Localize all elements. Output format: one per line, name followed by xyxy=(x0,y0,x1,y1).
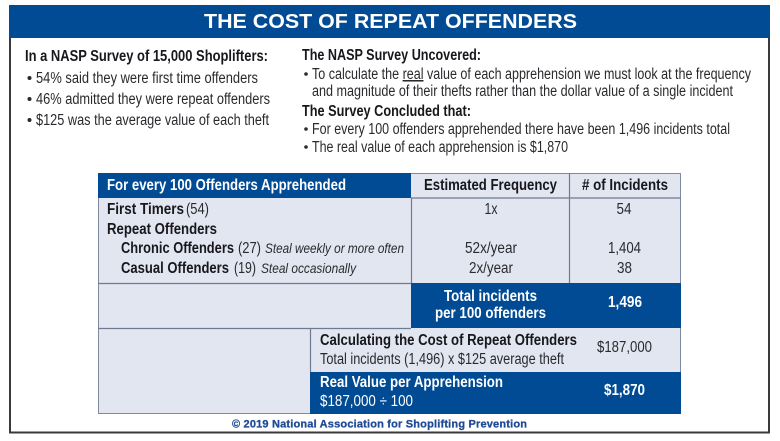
row: first timers xyxy=(107,201,632,218)
title banner xyxy=(9,5,770,38)
row: casual offenders: 38 xyxy=(617,260,632,277)
row: chronic offenders: 52x/year xyxy=(465,240,517,257)
table header row: # of Incidents xyxy=(582,177,668,194)
row: first timers: (54) xyxy=(186,201,209,218)
row: calculating the cost xyxy=(320,332,652,368)
row: total incidents: 1,496 xyxy=(608,294,642,311)
table header row xyxy=(98,173,668,198)
text block: survey concluded: The Survey Concluded that: xyxy=(302,103,471,120)
row: repeat offenders: Repeat Offenders xyxy=(107,221,217,238)
row: casual offenders: Casual Offenders xyxy=(121,260,229,277)
text block: survey facts: 54% said they were first time offenders xyxy=(36,70,258,87)
row: first timers: 1x xyxy=(484,201,498,218)
text block: survey facts: 46% admitted they were repeat offenders xyxy=(36,91,270,108)
title banner: THE COST OF REPEAT OFFENDERS xyxy=(204,10,577,33)
table background xyxy=(98,174,680,414)
row: chronic offenders: 1,404 xyxy=(608,240,641,257)
text block: survey concluded xyxy=(302,103,730,156)
footer copyright: © 2019 National Association for Shoplifting Prevention xyxy=(232,418,527,430)
row: calculating the cost: Total incidents (1,496) x $125 average theft xyxy=(320,351,565,368)
row: calculating the cost: $187,000 xyxy=(597,339,652,356)
row: total incidents: Total incidents xyxy=(444,288,537,305)
row: casual offenders xyxy=(121,260,632,277)
row: chronic offenders: (27) xyxy=(238,240,261,257)
row: real value per apprehension: $187,000 ÷ 100 xyxy=(320,393,413,410)
text block: survey uncovered: The NASP Survey Uncovered: xyxy=(302,47,481,64)
table header row: For every 100 Offenders Apprehended xyxy=(107,177,346,194)
row: first timers: 54 xyxy=(616,201,632,218)
row: total incidents xyxy=(411,283,681,328)
row: casual offenders: (19) xyxy=(234,260,256,277)
row: casual offenders: Steal occasionally xyxy=(261,260,357,276)
row: real value per apprehension: $1,870 xyxy=(604,382,645,399)
text block: survey uncovered xyxy=(302,47,751,100)
table xyxy=(98,173,681,414)
text block: survey concluded: The real value of each apprehension is $1,870 xyxy=(312,139,568,156)
row: chronic offenders: Steal weekly or more often xyxy=(265,240,404,256)
row: first timers: First Timers xyxy=(107,201,184,218)
text block: survey facts xyxy=(25,48,270,129)
row: chronic offenders: Chronic Offenders xyxy=(121,240,234,257)
row: real value per apprehension: Real Value per Apprehension xyxy=(320,374,503,391)
row: total incidents: per 100 offenders xyxy=(435,305,546,322)
table header row: Estimated Frequency xyxy=(424,177,557,194)
row: chronic offenders xyxy=(121,240,641,257)
row: calculating the cost: Calculating the Cost of Repeat Offenders xyxy=(320,332,577,349)
row: real value per apprehension xyxy=(310,372,681,414)
text block: survey facts: In a NASP Survey of 15,000 Shoplifters: xyxy=(25,48,268,65)
text block: survey facts: $125 was the average value of each theft xyxy=(36,112,270,129)
row: casual offenders: 2x/year xyxy=(469,260,513,277)
